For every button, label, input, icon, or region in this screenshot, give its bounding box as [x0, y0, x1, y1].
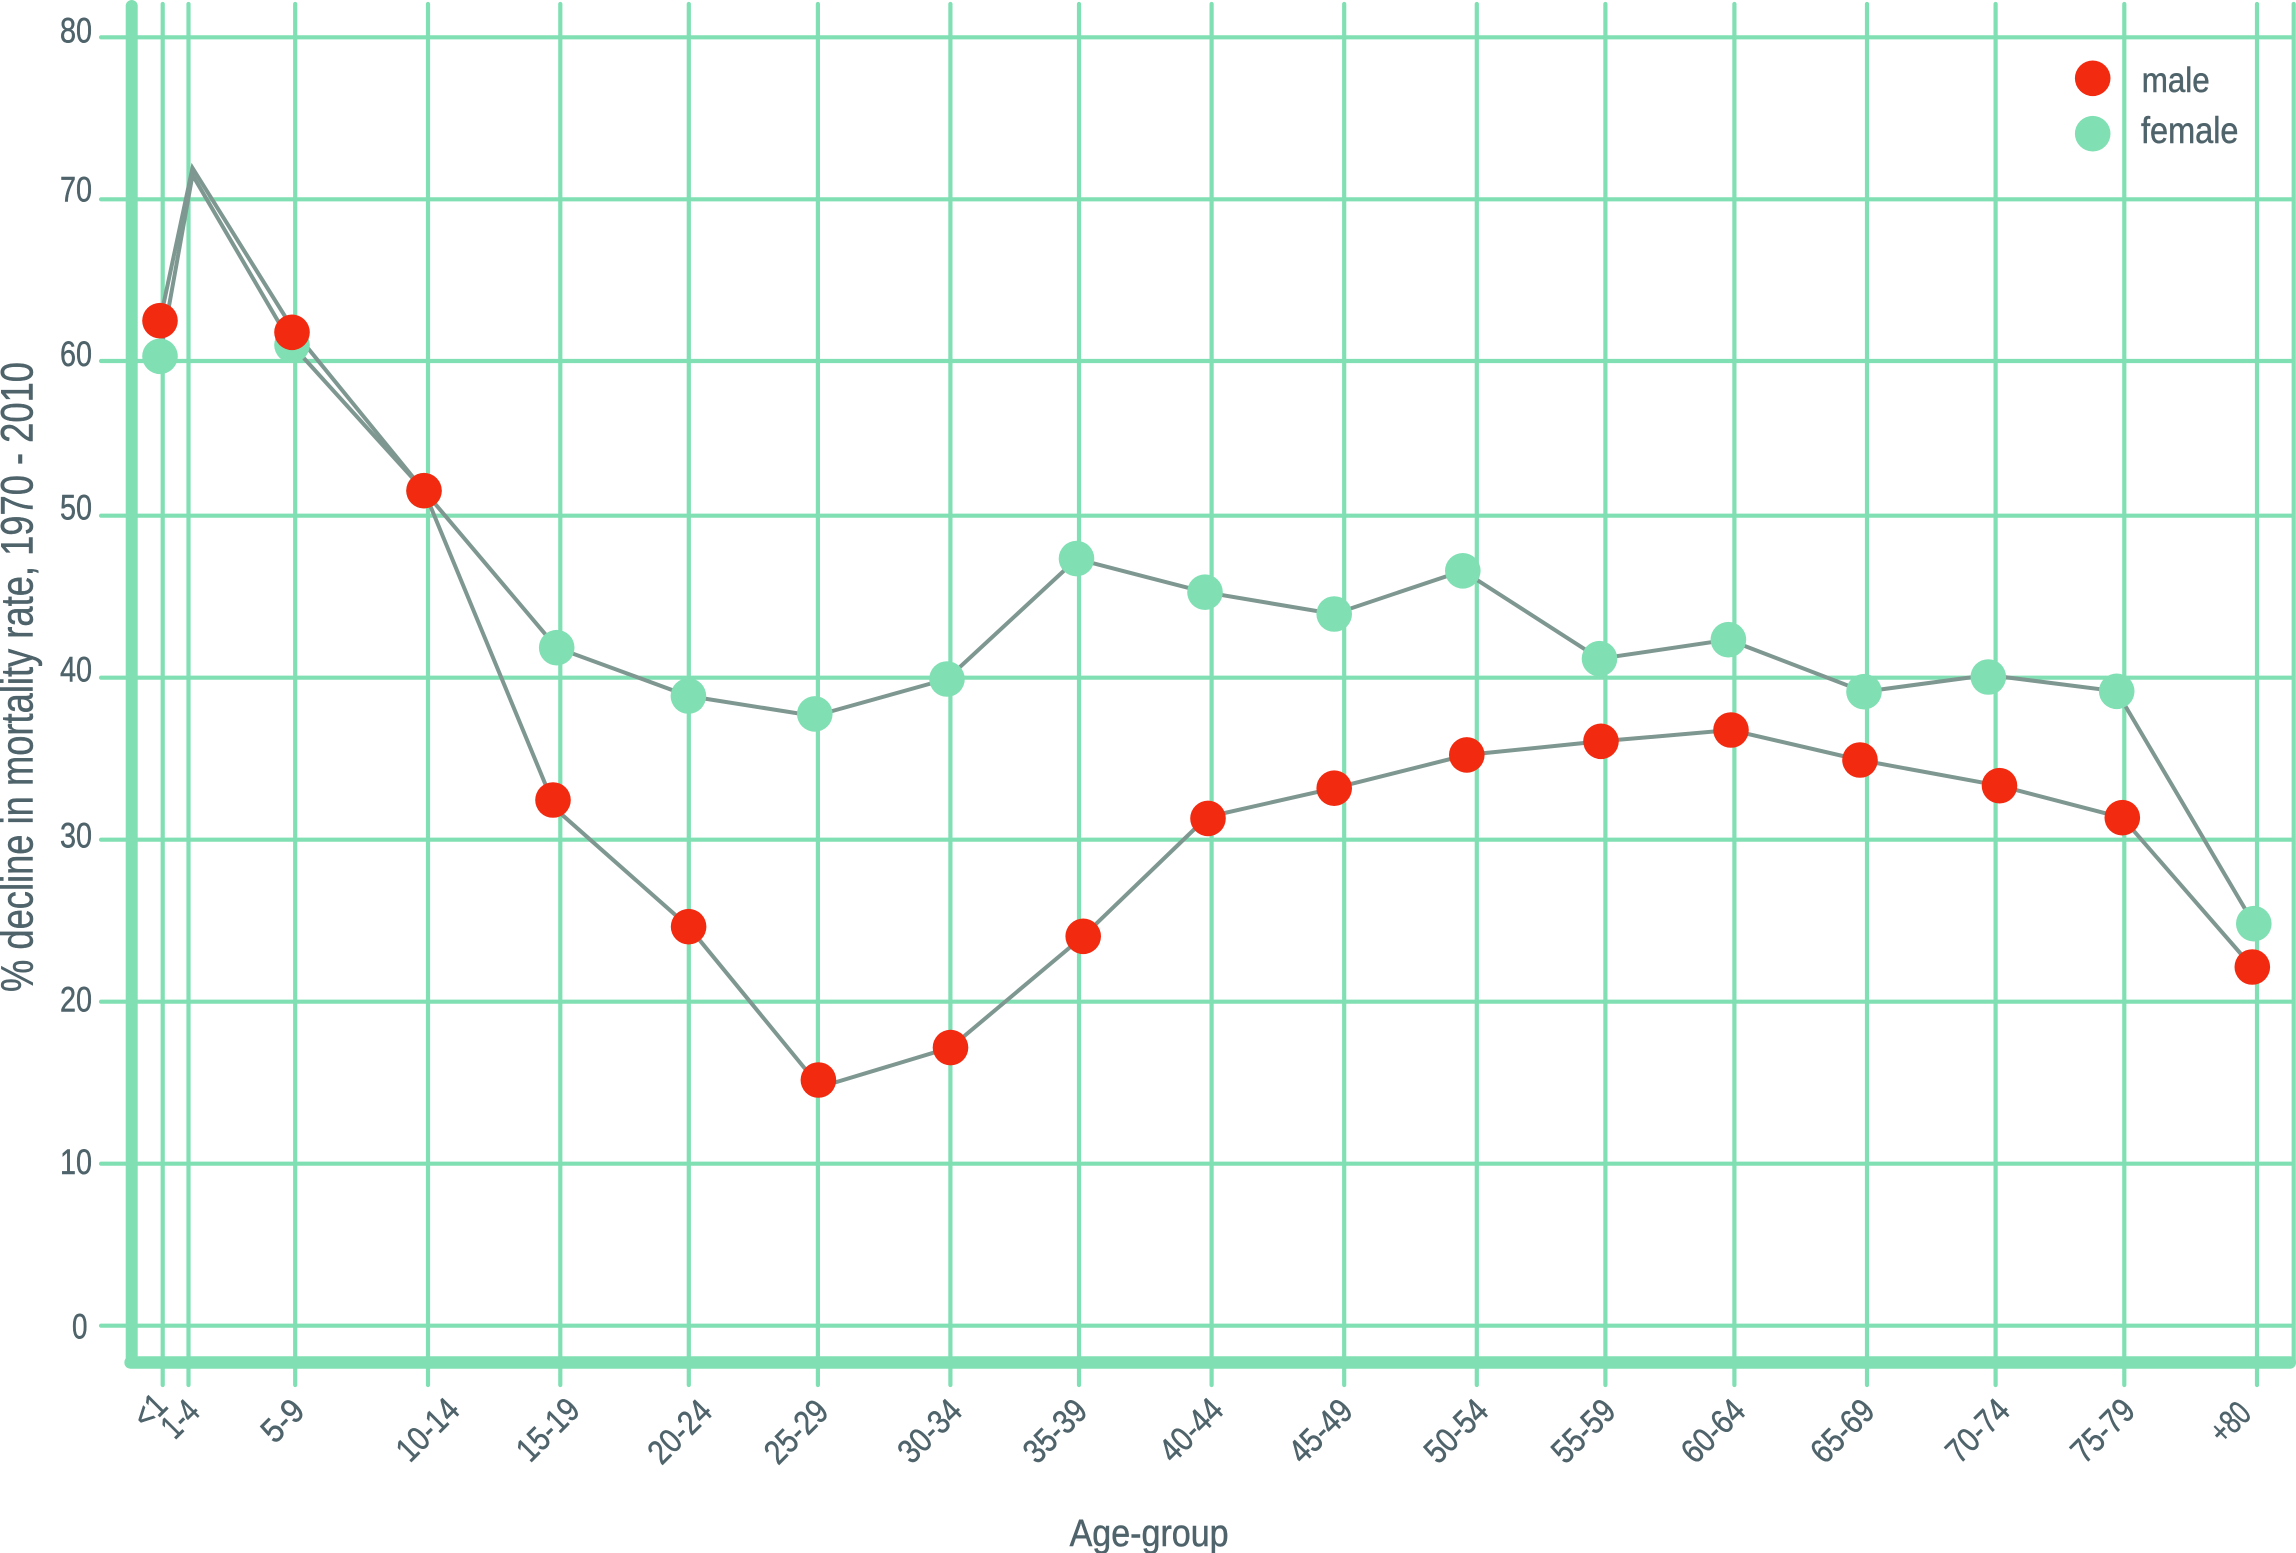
x axis tick labels: 70-74: [1938, 1391, 2017, 1471]
y axis tick labels: 50: [60, 487, 92, 527]
y axis tick labels: 30: [60, 816, 92, 856]
y axis tick labels: [60, 11, 92, 1346]
legend: male: [2142, 61, 2210, 100]
y axis tick labels: 0: [72, 1306, 88, 1346]
x axis tick labels: 15-19: [509, 1391, 587, 1469]
male data points: [142, 303, 2270, 1098]
x axis tick labels: [125, 1386, 2259, 1472]
y axis tick labels: 60: [60, 334, 92, 374]
x axis tick labels: 65-69: [1803, 1392, 1882, 1471]
y axis tick labels: 70: [60, 170, 92, 210]
x axis tick labels: 75-79: [2063, 1391, 2143, 1471]
x axis tick labels: 25-29: [757, 1392, 836, 1472]
x axis tick labels: 10-14: [389, 1391, 467, 1469]
x axis tick labels: 30-34: [890, 1392, 970, 1471]
y axis tick labels: 80: [60, 11, 92, 51]
y axis tick labels: 10: [60, 1142, 92, 1182]
x axis tick labels: 5-9: [254, 1392, 312, 1450]
x axis tick labels: 20-24: [640, 1392, 720, 1472]
y axis tick labels: 20: [60, 980, 92, 1020]
y axis line: [126, 6, 138, 1362]
x axis tick labels: <1: [125, 1386, 175, 1436]
y axis tick labels: 40: [60, 650, 92, 690]
x axis tick labels: 45-49: [1281, 1392, 1360, 1471]
x axis tick labels: 1-4: [153, 1392, 207, 1446]
female series line: [160, 175, 2254, 924]
x axis tick labels: +80: [2202, 1394, 2259, 1451]
female data points: [142, 327, 2272, 942]
male series line: [160, 168, 2252, 1087]
x axis tick labels: 50-54: [1417, 1392, 1496, 1471]
x axis line: [124, 1356, 2296, 1369]
x axis tick labels: 35-39: [1016, 1392, 1095, 1471]
legend: female: [2141, 110, 2238, 151]
x axis tick labels: 40-44: [1152, 1391, 1231, 1470]
legend: [2075, 61, 2238, 152]
x axis tick labels: 55-59: [1544, 1392, 1623, 1471]
x axis tick labels: 60-64: [1674, 1392, 1753, 1471]
